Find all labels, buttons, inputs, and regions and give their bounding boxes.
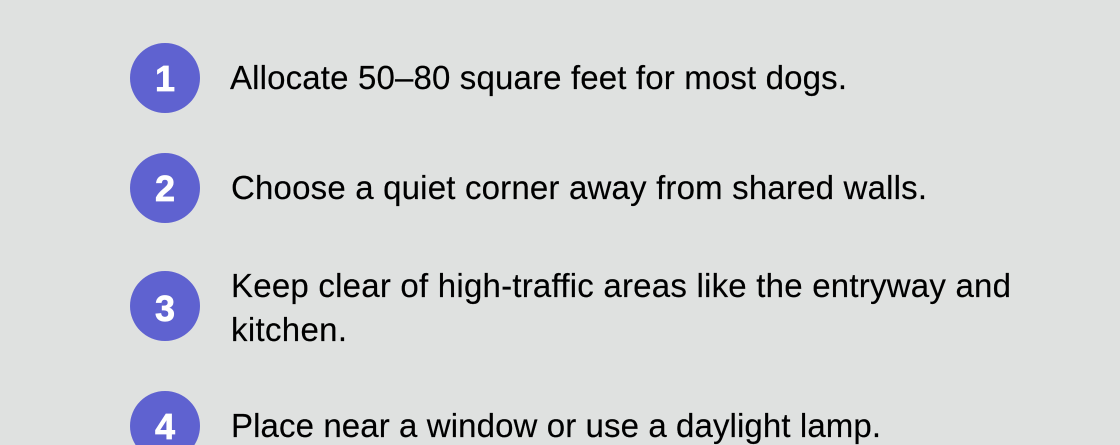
text: item 3: Keep clear of high-traffic areas like the entryway and: [231, 267, 1011, 304]
list item 4: [130, 391, 881, 445]
number badge 1: [130, 43, 200, 113]
number badge 2: 2: [155, 168, 175, 209]
number badge 2: [130, 153, 200, 223]
list item 2: [130, 153, 927, 223]
number badge 1: 1: [155, 58, 175, 99]
number badge 3: [130, 271, 200, 341]
number badge 4: [130, 391, 200, 445]
list item 1: [130, 43, 847, 113]
text: item 3: [231, 267, 1011, 348]
text: item 3: kitchen.: [231, 311, 347, 348]
number badge 3: 3: [155, 288, 175, 329]
text: item 4: Place near a window or use a daylight lamp.: [231, 407, 881, 444]
text: item 1: Allocate 50–80 square feet for most dogs.: [230, 59, 847, 96]
list item 3: [130, 267, 1011, 348]
text: item 2: Choose a quiet corner away from shared walls.: [231, 169, 927, 206]
